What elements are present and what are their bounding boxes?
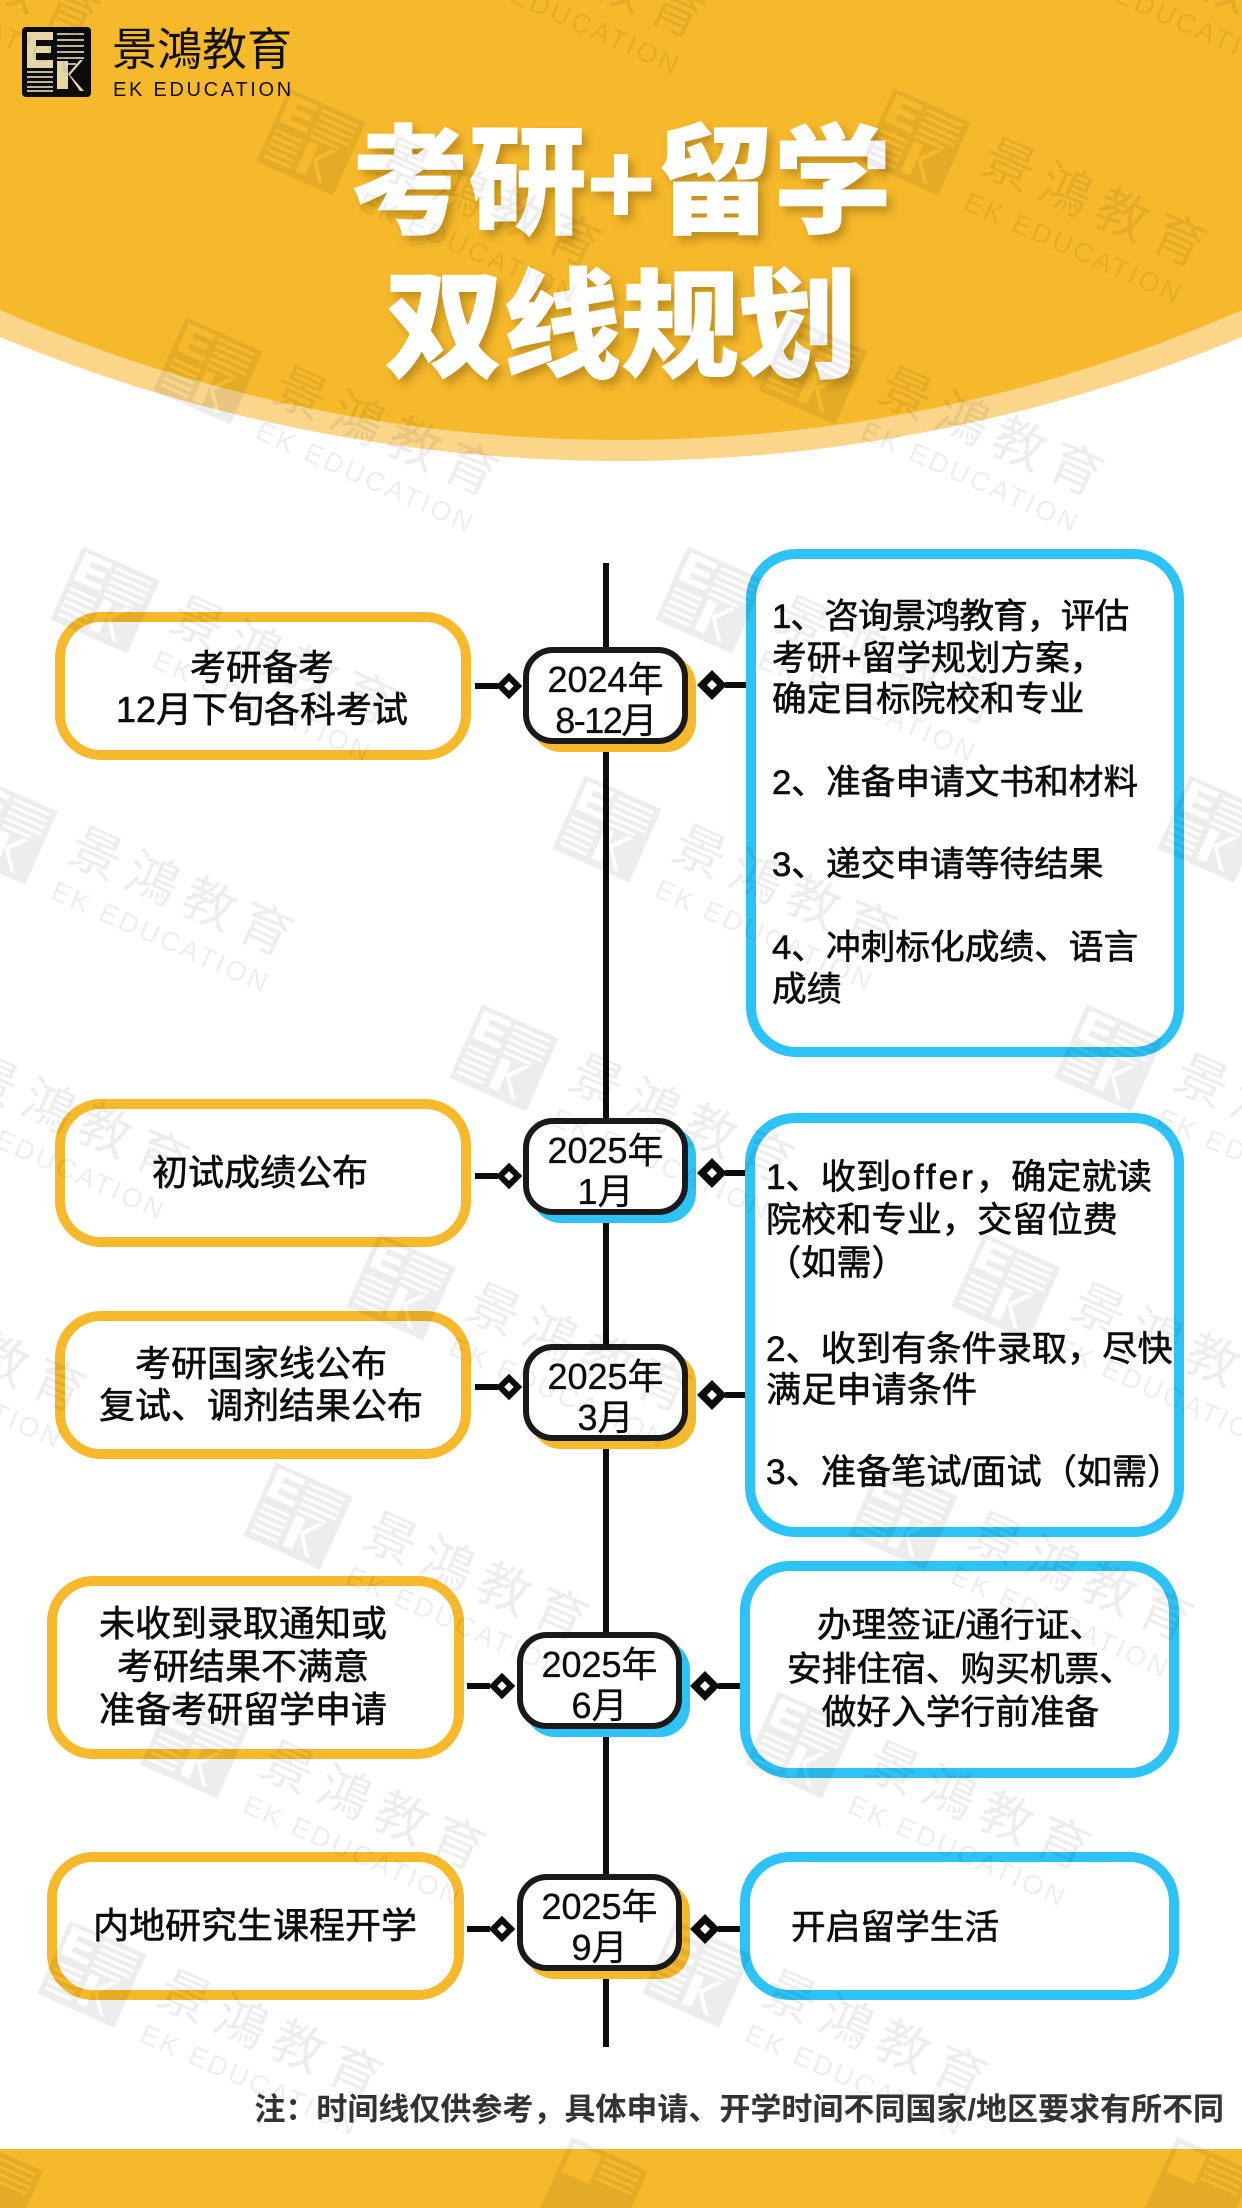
watermark pattern: EK EDUCATION [947, 1561, 1175, 1684]
logo english name: EK EDUCATION [113, 79, 294, 101]
footer band [0, 2149, 1242, 2208]
text: left 3: 考研国家线公布 [135, 1343, 387, 1384]
date label [523, 1344, 688, 1441]
watermark pattern: 景鴻教育 [870, 358, 1120, 511]
footnote: 注：时间线仅供参考，具体申请、开学时间不同国家/地区要求有所不同 [254, 2092, 1224, 2127]
item 1: 考研+留学规划方案， [772, 640, 1104, 678]
panel: left 1 [55, 612, 471, 760]
watermark pattern: EK EDUCATION [342, 1561, 570, 1684]
text: right 2 [766, 1158, 1182, 1492]
date label: 2025年 [541, 1644, 658, 1685]
text: left 3 [99, 1343, 423, 1426]
date label: 2024年 [547, 659, 664, 700]
watermark pattern: EK EDUCATION [741, 2019, 969, 2142]
watermark pattern: 景鴻教育 [458, 1274, 708, 1427]
watermark pattern: 景鴻教育 [767, 587, 1017, 740]
watermark pattern: 景鴻教育 [754, 1961, 1004, 2114]
text: right 3: 办理签证/通行证、 [817, 1607, 1104, 1645]
text: right 4: 开启留学生活 [791, 1909, 999, 1947]
item 1: 确定目标院校和专业 [772, 681, 1084, 719]
watermark pattern: EK EDUCATION [651, 874, 879, 997]
watermark pattern: EK EDUCATION [445, 1332, 673, 1455]
date: 2025 1 [523, 1118, 696, 1223]
icon: EK logo mark [22, 27, 91, 97]
watermark pattern: EK EDUCATION [239, 1790, 467, 1913]
watermark pattern: 景鴻教育 [368, 129, 618, 282]
item 2: 满足申请条件 [766, 1371, 977, 1410]
text: right 3: 做好入学行前准备 [822, 1694, 1099, 1732]
panel: left 2 [55, 1099, 471, 1247]
item 1 [766, 1158, 1152, 1283]
date shadow [531, 1352, 696, 1449]
text: left 3: 复试、调剂结果公布 [99, 1385, 423, 1426]
item 4: 成绩 [772, 970, 841, 1008]
item 2 [766, 1330, 1173, 1410]
date shadow [525, 1882, 690, 1979]
date label: 8-12月 [555, 700, 656, 741]
watermark pattern: EK EDUCATION [47, 876, 275, 999]
watermark pattern: 景鴻教育 [355, 1503, 605, 1656]
logo [22, 24, 294, 101]
panel: left 5 [47, 1852, 464, 2000]
date label: 3月 [577, 1397, 634, 1438]
item 1: 1、收到offer，确定就读 [766, 1158, 1152, 1197]
watermark pattern: EK EDUCATION [136, 2019, 364, 2142]
date shadow [531, 1126, 696, 1223]
item 4 [772, 929, 1138, 1008]
panel: left 4 [47, 1576, 464, 1759]
watermark pattern: 景鴻教育 [252, 1732, 502, 1885]
panel: right 3 [740, 1561, 1179, 1778]
date label: 1月 [577, 1171, 634, 1212]
text: right 1 [772, 598, 1138, 1008]
date label [523, 647, 688, 744]
item 1: 1、咨询景鸿教育，评估 [772, 598, 1128, 636]
watermark pattern: 景鴻教育 [149, 1961, 399, 2114]
item 4: 4、冲刺标化成绩、语言 [772, 929, 1138, 967]
date label [517, 1632, 682, 1729]
watermark pattern: 景鴻教育 [960, 1503, 1210, 1656]
item 1: （如需） [766, 1244, 907, 1283]
watermark pattern: 景鴻教育 [857, 1732, 1107, 1885]
watermark pattern: 景鴻教育 [561, 1045, 811, 1198]
panel: left 3 [55, 1311, 471, 1459]
date label: 2025年 [541, 1886, 658, 1927]
date shadow [525, 1640, 690, 1737]
text: left 4: 准备考研留学申请 [99, 1689, 387, 1730]
date shadow [531, 655, 696, 752]
date: 2025 6 [517, 1632, 690, 1737]
watermark pattern: 景鴻教育 [162, 587, 412, 740]
watermark pattern: 景鴻教育 [60, 818, 310, 971]
text: left 1 [116, 647, 408, 730]
text: left 4 [99, 1603, 387, 1730]
text: left 4: 未收到录取通知或 [99, 1603, 387, 1644]
item 1: 院校和专业，交留位费 [766, 1201, 1118, 1240]
text: left 1: 12月下旬各科考试 [116, 689, 408, 730]
watermark pattern: 景鴻教育 [265, 358, 515, 511]
watermark pattern: EK EDUCATION [355, 187, 583, 310]
title line 2: 双线规划 [385, 262, 857, 394]
date: 2025 9 [517, 1874, 690, 1979]
panel: right 1 [746, 549, 1184, 1057]
watermark pattern: EK EDUCATION [754, 645, 982, 768]
watermark pattern: EK EDUCATION [857, 416, 1085, 539]
date label [517, 1874, 682, 1971]
text: left 2: 初试成绩公布 [152, 1152, 368, 1193]
text: right 3 [787, 1607, 1134, 1732]
panel: right 2 [745, 1113, 1184, 1537]
date label [523, 1118, 688, 1215]
date label: 9月 [571, 1927, 628, 1968]
panel: right 4 [740, 1852, 1179, 2000]
date: 2024 8-12 [523, 647, 696, 752]
text: left 1: 考研备考 [190, 647, 334, 688]
header banner [0, 0, 1242, 461]
watermark pattern: EK EDUCATION [844, 1790, 1072, 1913]
watermark pattern: EK EDUCATION [149, 645, 377, 768]
text: left 5: 内地研究生课程开学 [93, 1905, 417, 1946]
item 3: 3、递交申请等待结果 [772, 846, 1103, 884]
title line 1: 考研+留学 [351, 118, 891, 250]
item 2: 2、收到有条件录取，尽快 [766, 1330, 1173, 1369]
watermark pattern: EK EDUCATION [548, 1103, 776, 1226]
item 2: 2、准备申请文书和材料 [772, 764, 1138, 802]
item 1 [772, 598, 1128, 719]
text: right 3: 安排住宿、购买机票、 [787, 1650, 1134, 1688]
item 3: 3、准备笔试/面试（如需） [766, 1453, 1182, 1492]
title [351, 118, 896, 394]
logo name: 景鴻教育 [112, 24, 292, 75]
date: 2025 3 [523, 1344, 696, 1449]
text: left 4: 考研结果不满意 [117, 1646, 369, 1687]
watermark pattern: 景鴻教育 [664, 816, 914, 969]
watermark pattern: EK EDUCATION [960, 187, 1188, 310]
watermark pattern: 景鴻教育 [973, 129, 1223, 282]
date label: 2025年 [547, 1356, 664, 1397]
watermark pattern: EK EDUCATION [252, 416, 480, 539]
date label: 6月 [571, 1685, 628, 1726]
date label: 2025年 [547, 1130, 664, 1171]
